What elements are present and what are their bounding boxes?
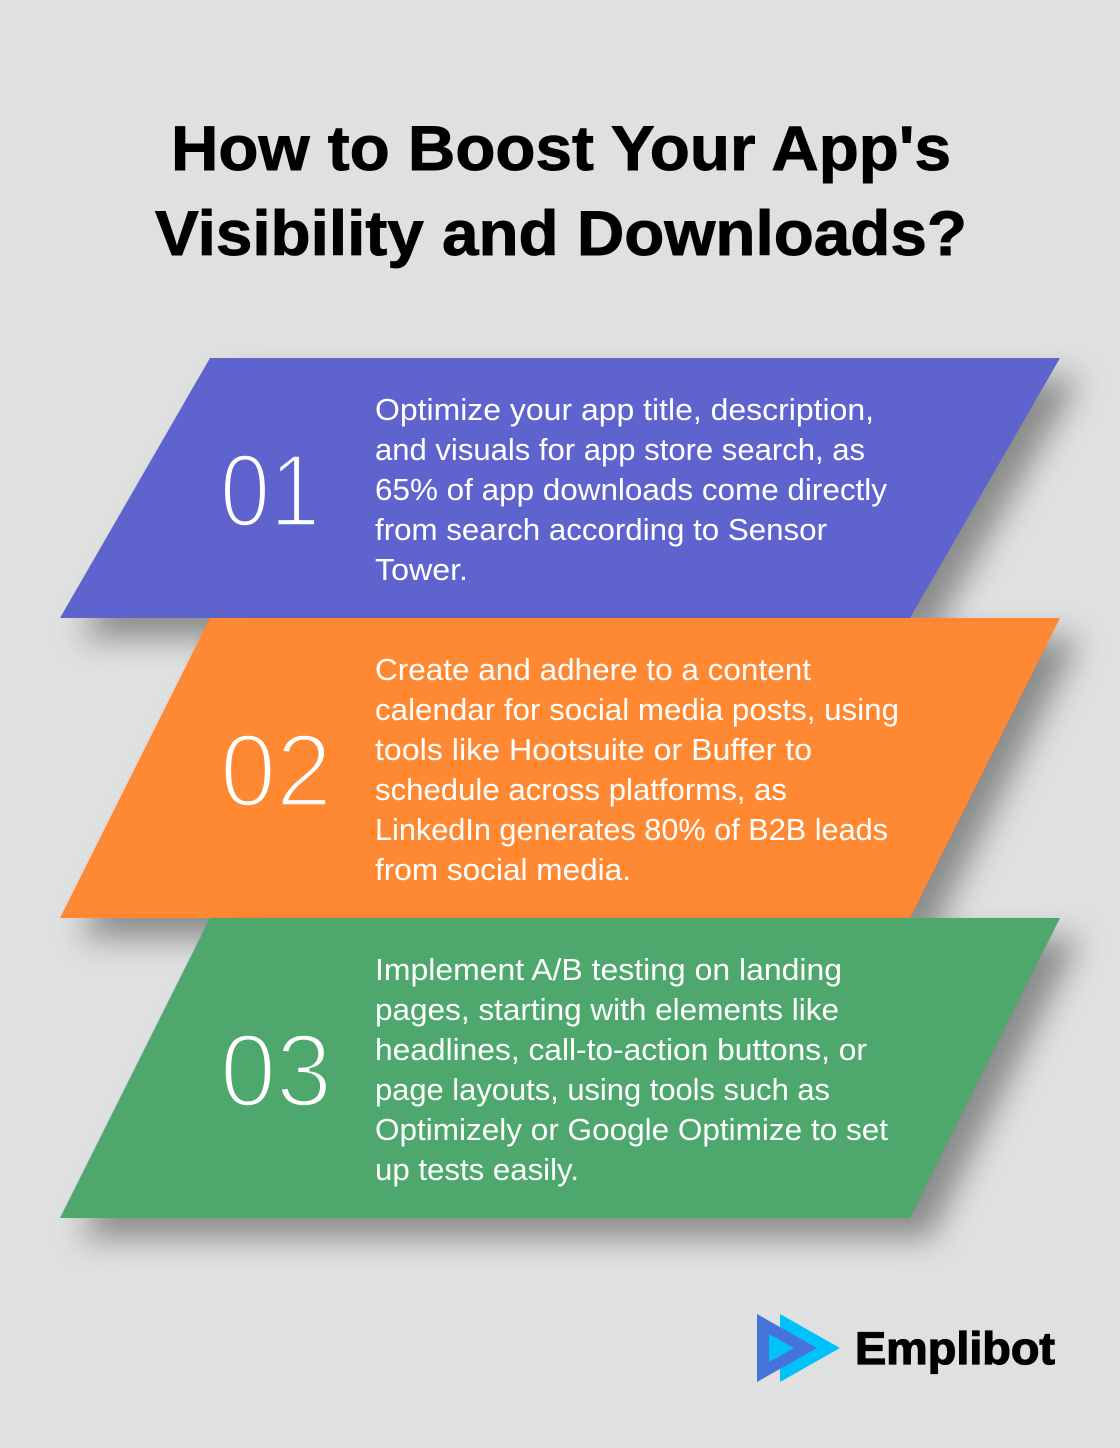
title: How to Boost Your App's xyxy=(171,114,951,184)
step 03 text: pages, starting with elements like xyxy=(375,993,839,1027)
step 03 text xyxy=(375,953,889,1187)
step 03 text: page layouts, using tools such as xyxy=(375,1073,830,1107)
step 01 text: from search according to Sensor xyxy=(375,513,827,547)
step 01 text: Tower. xyxy=(375,553,468,587)
logo wordmark: Emplibot xyxy=(855,1323,1055,1374)
step 01 text xyxy=(375,393,888,587)
step 02 text: tools like Hootsuite or Buffer to xyxy=(375,733,812,767)
step 02 text: from social media. xyxy=(375,853,631,887)
panel: step 03 xyxy=(60,918,1080,1238)
title: Visibility and Downloads? xyxy=(155,199,967,269)
icon: play triangles xyxy=(757,1314,840,1382)
step 02 text xyxy=(375,653,899,887)
step number 03: 03 xyxy=(220,1013,332,1128)
step 02 text: LinkedIn generates 80% of B2B leads xyxy=(375,813,888,847)
step 02 text: schedule across platforms, as xyxy=(375,773,787,807)
step 02 text: calendar for social media posts, using xyxy=(375,693,899,727)
logo: Emplibot xyxy=(757,1314,1055,1382)
step 03 text: Implement A/B testing on landing xyxy=(375,953,842,987)
step 01 text: 65% of app downloads come directly xyxy=(375,473,888,507)
step 03 text: up tests easily. xyxy=(375,1153,579,1187)
step 03 text: Optimizely or Google Optimize to set xyxy=(375,1113,889,1147)
step number 02: 02 xyxy=(220,713,332,828)
panel: step 02 xyxy=(60,618,1080,938)
step 01 text: Optimize your app title, description, xyxy=(375,393,874,427)
step number 01: 01 xyxy=(220,433,320,548)
step 03 text: headlines, call-to-action buttons, or xyxy=(375,1033,867,1067)
step 01 text: and visuals for app store search, as xyxy=(375,433,865,467)
step 02 text: Create and adhere to a content xyxy=(375,653,812,687)
panel: step 01 xyxy=(60,358,1080,638)
title xyxy=(155,114,967,269)
